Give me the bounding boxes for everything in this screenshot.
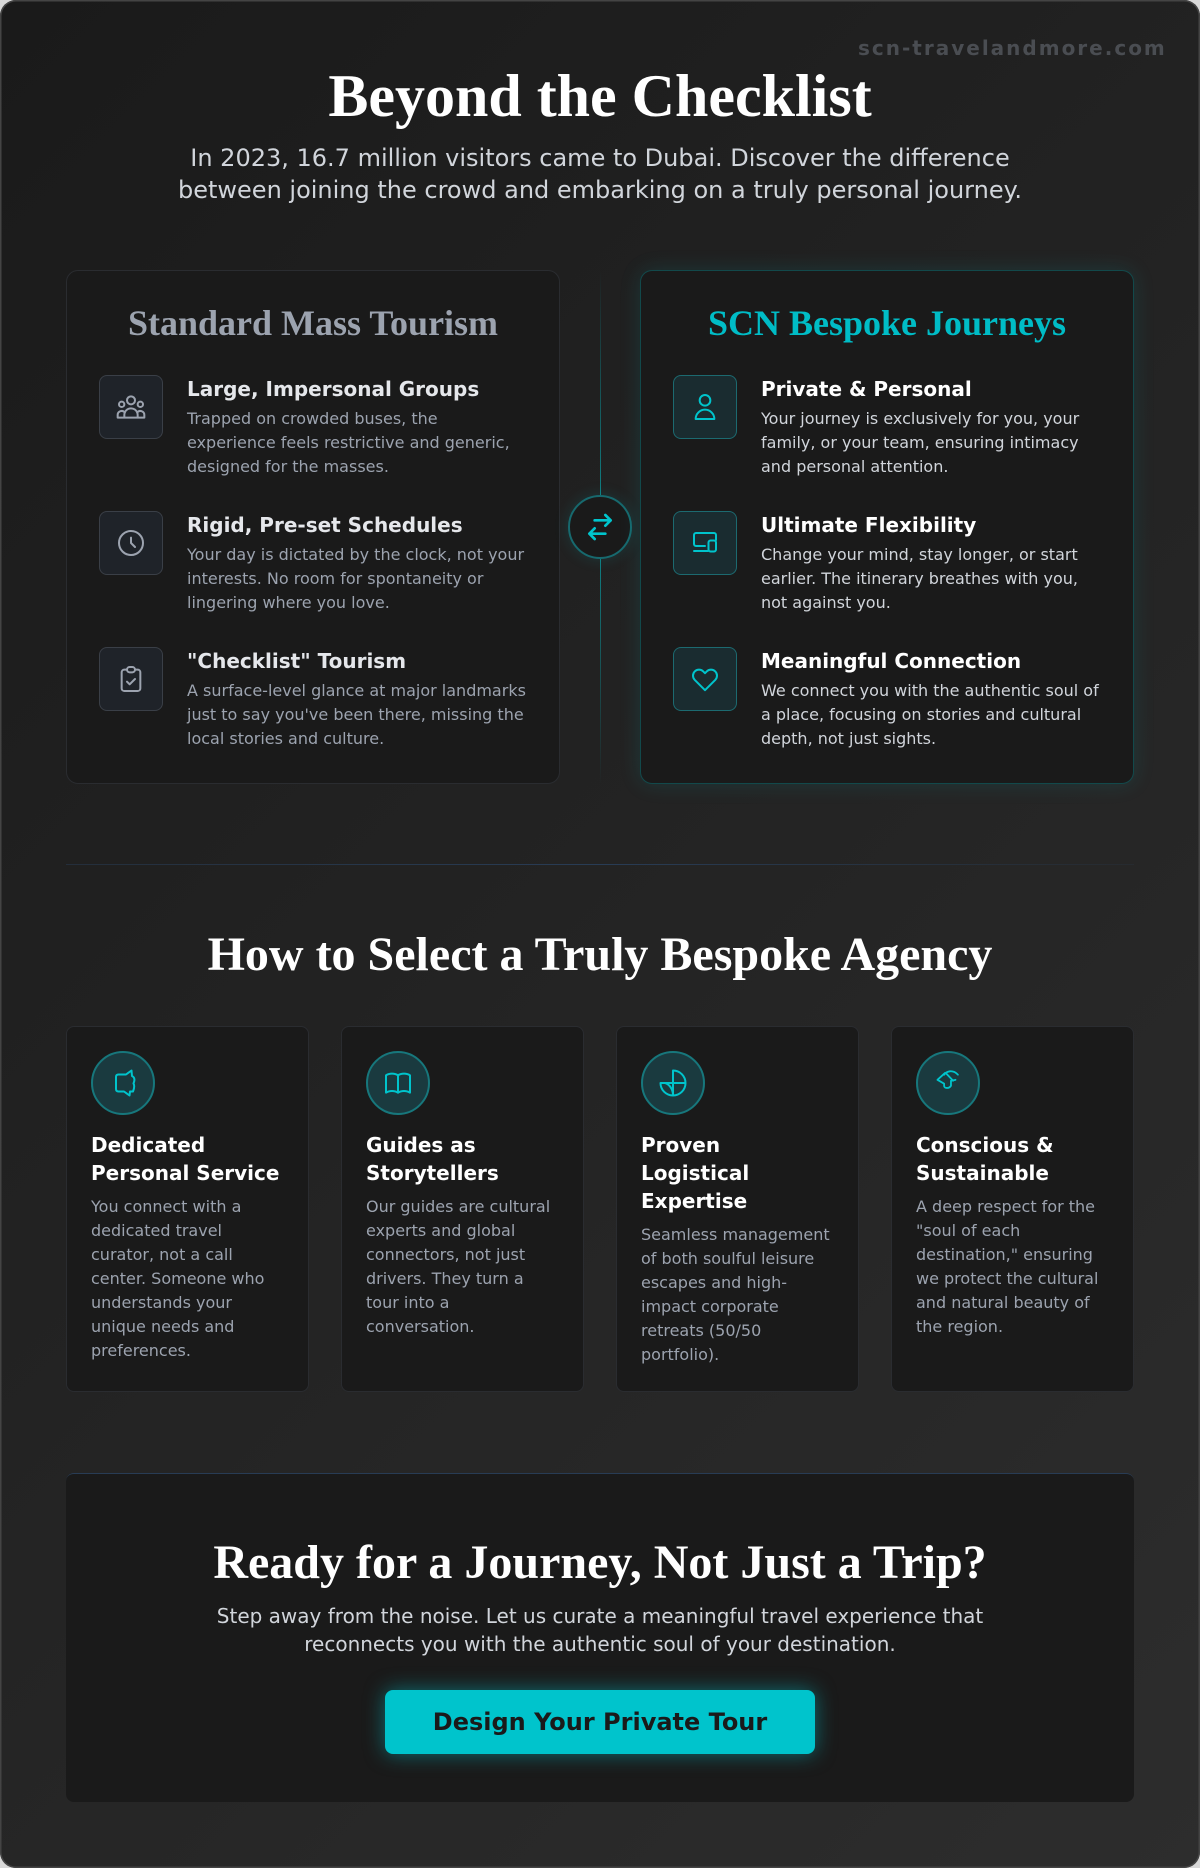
- card text: tour into a: [366, 1293, 449, 1312]
- card text: impact corporate: [641, 1297, 779, 1316]
- icon: clock: [99, 511, 163, 575]
- panel: bespoke journeys: a place, focusing on stories and cultural: [761, 705, 1081, 724]
- card text: experts and global: [366, 1221, 515, 1240]
- panel: standard mass tourism: experience feels restrictive and generic,: [187, 433, 510, 452]
- panel: standard mass tourism: designed for the masses.: [187, 457, 389, 476]
- card text: Seamless management: [641, 1225, 830, 1244]
- panel: standard mass tourism: lingering where you love.: [187, 593, 390, 612]
- item: connection: [761, 649, 1100, 748]
- card text: the region.: [916, 1317, 1003, 1336]
- panel: bespoke journeys: depth, not just sights.: [761, 729, 936, 748]
- card heading: Storytellers: [366, 1161, 499, 1185]
- watermark: scn-travelandmore.com: [858, 36, 1167, 60]
- panel heading: Standard Mass Tourism: [128, 303, 498, 343]
- cta text: reconnects you with the authentic soul of your destination.: [304, 1632, 896, 1656]
- card text: drivers. They turn a: [366, 1269, 524, 1288]
- card text: [366, 1197, 550, 1336]
- panel: standard mass tourism: Rigid, Pre-set Schedules: [187, 513, 463, 537]
- subtitle: between joining the crowd and embarking on a truly personal journey.: [178, 176, 1022, 204]
- card heading: [916, 1133, 1054, 1185]
- card: storytellers: [341, 1026, 584, 1392]
- icon: devices: [673, 511, 737, 575]
- card heading: Expertise: [641, 1189, 747, 1213]
- card text: escapes and high-: [641, 1273, 787, 1292]
- card: sustainable: [891, 1026, 1134, 1392]
- subtitle: [178, 144, 1022, 204]
- card heading: Dedicated: [91, 1133, 205, 1157]
- card: dedicated service: [66, 1026, 309, 1392]
- card heading: Proven: [641, 1133, 720, 1157]
- card text: conversation.: [366, 1317, 474, 1336]
- card text: retreats (50/50: [641, 1321, 761, 1340]
- card heading: Guides as: [366, 1133, 476, 1157]
- card text: understands your: [91, 1293, 232, 1312]
- card text: You connect with a: [91, 1197, 241, 1216]
- panel: bespoke journeys: family, or your team, ensuring intimacy: [761, 433, 1079, 452]
- card text: preferences.: [91, 1341, 191, 1360]
- item: rigid schedules: [187, 513, 524, 612]
- panel: bespoke journeys: Private & Personal: [761, 377, 972, 401]
- panel: bespoke journeys: Change your mind, stay longer, or start: [761, 545, 1078, 564]
- card text: we protect the cultural: [916, 1269, 1098, 1288]
- panel: standard mass tourism: Your day is dictated by the clock, not your: [187, 545, 524, 564]
- card: logistical expertise: [616, 1026, 859, 1392]
- card heading: [366, 1133, 499, 1185]
- card text: of both soulful leisure: [641, 1249, 814, 1268]
- card text: "soul of each: [916, 1221, 1020, 1240]
- card text: unique needs and: [91, 1317, 234, 1336]
- card heading: Sustainable: [916, 1161, 1049, 1185]
- panel: standard mass tourism: just to say you've been there, missing the: [187, 705, 524, 724]
- card text: dedicated travel: [91, 1221, 222, 1240]
- card text: A deep respect for the: [916, 1197, 1095, 1216]
- cta heading: Ready for a Journey, Not Just a Trip?: [213, 1536, 987, 1589]
- card text: connectors, not just: [366, 1245, 525, 1264]
- title: Beyond the Checklist: [328, 63, 872, 129]
- card heading: Conscious &: [916, 1133, 1054, 1157]
- cta button: [385, 1690, 815, 1754]
- card text: Our guides are cultural: [366, 1197, 550, 1216]
- card text: destination," ensuring: [916, 1245, 1093, 1264]
- icon: sprout: [916, 1051, 980, 1115]
- item: private: [761, 377, 1080, 476]
- icon: pie: [641, 1051, 705, 1115]
- icon: book: [366, 1051, 430, 1115]
- icon: chat: [91, 1051, 155, 1115]
- panel: call to action: [66, 1473, 1134, 1802]
- cta text: [217, 1604, 983, 1656]
- icon: person: [673, 375, 737, 439]
- panel: bespoke journeys: and personal attention.: [761, 457, 948, 476]
- item: flexibility: [761, 513, 1078, 612]
- panel heading: SCN Bespoke Journeys: [708, 303, 1066, 343]
- connector line: [600, 270, 601, 784]
- icon: swap arrows: [568, 495, 632, 559]
- panel: standard mass tourism: Trapped on crowded buses, the: [187, 409, 438, 428]
- icon: group: [99, 375, 163, 439]
- card text: center. Someone who: [91, 1269, 264, 1288]
- card heading: Logistical: [641, 1161, 749, 1185]
- card text: and natural beauty of: [916, 1293, 1090, 1312]
- subtitle: In 2023, 16.7 million visitors came to Dubai. Discover the difference: [190, 144, 1010, 172]
- card heading: [91, 1133, 279, 1185]
- panel: bespoke journeys: Your journey is exclusively for you, your: [761, 409, 1079, 428]
- panel: bespoke journeys: [640, 270, 1134, 784]
- card heading: [641, 1133, 749, 1213]
- panel: standard mass tourism: interests. No room for spontaneity or: [187, 569, 483, 588]
- cta text: Step away from the noise. Let us curate a meaningful travel experience that: [217, 1604, 983, 1628]
- item: checklist tourism: [186, 649, 526, 748]
- panel: standard mass tourism: Large, Impersonal Groups: [187, 377, 479, 401]
- panel: bespoke journeys: We connect you with the authentic soul of: [761, 681, 1099, 700]
- section heading: How to Select a Truly Bespoke Agency: [208, 928, 992, 981]
- card heading: Personal Service: [91, 1161, 279, 1185]
- panel: standard mass tourism: "Checklist" Tourism: [187, 649, 406, 673]
- card text: curator, not a call: [91, 1245, 233, 1264]
- icon: heart: [673, 647, 737, 711]
- card text: portfolio).: [641, 1345, 719, 1364]
- panel: bespoke journeys: Meaningful Connection: [761, 649, 1021, 673]
- cta button: Design Your Private Tour: [433, 1708, 767, 1736]
- icon: clipboard: [99, 647, 163, 711]
- panel: bespoke journeys: earlier. The itinerary breathes with you,: [761, 569, 1078, 588]
- panel: standard mass tourism: [66, 270, 560, 784]
- panel: standard mass tourism: A surface-level glance at major landmarks: [187, 681, 526, 700]
- panel: bespoke journeys: not against you.: [761, 593, 891, 612]
- item: large groups: [186, 377, 510, 476]
- panel: bespoke journeys: Ultimate Flexibility: [761, 513, 976, 537]
- card text: [641, 1225, 830, 1364]
- card text: [916, 1197, 1098, 1336]
- card text: [91, 1197, 264, 1360]
- panel: standard mass tourism: local stories and culture.: [187, 729, 384, 748]
